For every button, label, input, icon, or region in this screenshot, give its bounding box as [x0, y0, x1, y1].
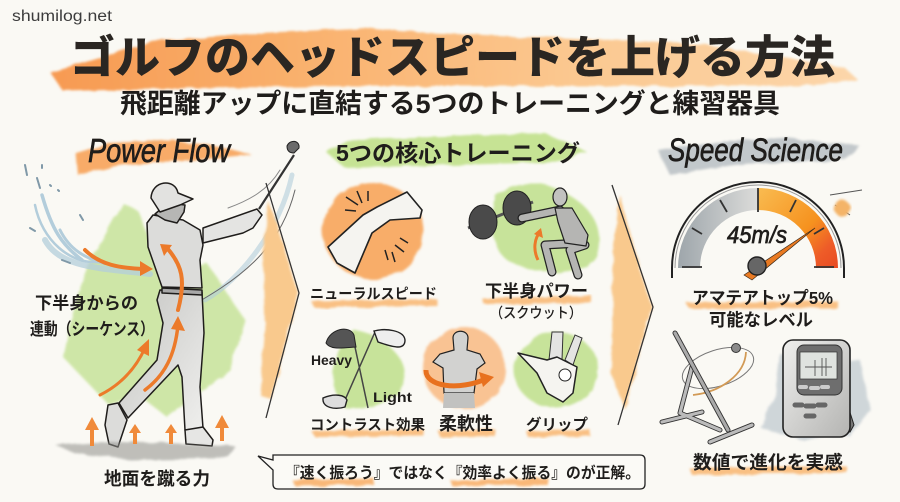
label: amateur top five percent [686, 288, 838, 330]
arm [203, 209, 262, 243]
label: contrast effect: コントラスト効果 [310, 417, 425, 434]
front shoe [185, 427, 213, 446]
text: lower body sequence: 下半身からの [35, 294, 138, 313]
icon: flexibility [423, 327, 505, 409]
neck and face [155, 203, 185, 223]
heading: core trainings: 5つの核心トレーニング [336, 140, 580, 166]
icon: grip [514, 332, 598, 408]
golfer [105, 183, 262, 447]
label: amateur top five percent: 可能なレベル [709, 310, 813, 330]
icon: heavy and light clubs: Light [373, 389, 412, 405]
callout: 『速く振ろう』ではなく『効率よく振る』のが正解。 [285, 463, 640, 482]
panel: power flow [25, 132, 299, 489]
label: flexibility: 柔軟性 [439, 414, 493, 434]
icon: heavy and light clubs [311, 329, 412, 409]
site name: shumilog.net [12, 8, 113, 25]
cap [151, 183, 193, 212]
panel: speed science [658, 132, 870, 475]
label: lower body power: （スクウット） [490, 305, 582, 322]
water splash and swing trail [25, 165, 295, 312]
icon: speed trainer stand [662, 333, 759, 442]
label: neural speed: ニューラルスピード [310, 286, 437, 303]
text: lower body sequence [30, 294, 154, 339]
label: feel progress in numbers: 数値で進化を実感 [693, 452, 843, 473]
icon: towel [323, 183, 423, 279]
title with brush stroke: ゴルフのヘッドスピードを上げる方法 [70, 32, 835, 83]
icon: squat [468, 184, 599, 275]
golf club [259, 141, 299, 209]
pants [119, 290, 204, 430]
heading: Speed Science: Speed Science [668, 132, 843, 168]
heading: core trainings [326, 133, 587, 168]
label: grip: グリップ [526, 415, 588, 434]
squatting figure [522, 188, 588, 275]
heading: Power Flow: Power Flow [88, 132, 232, 169]
power arrows [85, 244, 185, 395]
chevron arrow left [260, 183, 299, 418]
callout [258, 455, 645, 489]
text: lower body sequence: 連動（シーケンス） [30, 320, 154, 339]
gauge: 45m/s [727, 222, 787, 249]
belt [162, 288, 202, 295]
back shoe [105, 403, 127, 447]
ground arrows [85, 415, 229, 446]
chevron arrow right [612, 185, 653, 425]
icon: heavy and light clubs: Heavy [311, 353, 352, 368]
icon: speed measuring device [783, 340, 854, 437]
panel: five core trainings [310, 133, 599, 437]
text: kick the ground: 地面を蹴る力 [104, 469, 210, 489]
gray wash [760, 353, 870, 440]
subtitle: 飛距離アップに直結する5つのトレーニングと練習器具 [120, 88, 780, 119]
label: amateur top five percent: アマテアトップ5% [692, 288, 833, 308]
torso [147, 215, 203, 288]
gauge [672, 182, 862, 280]
green watercolor wash [63, 203, 245, 417]
barbell [468, 191, 533, 239]
ground shadow [55, 441, 235, 460]
label: lower body power: 下半身パワー [485, 282, 588, 301]
label: lower body power [482, 282, 592, 322]
